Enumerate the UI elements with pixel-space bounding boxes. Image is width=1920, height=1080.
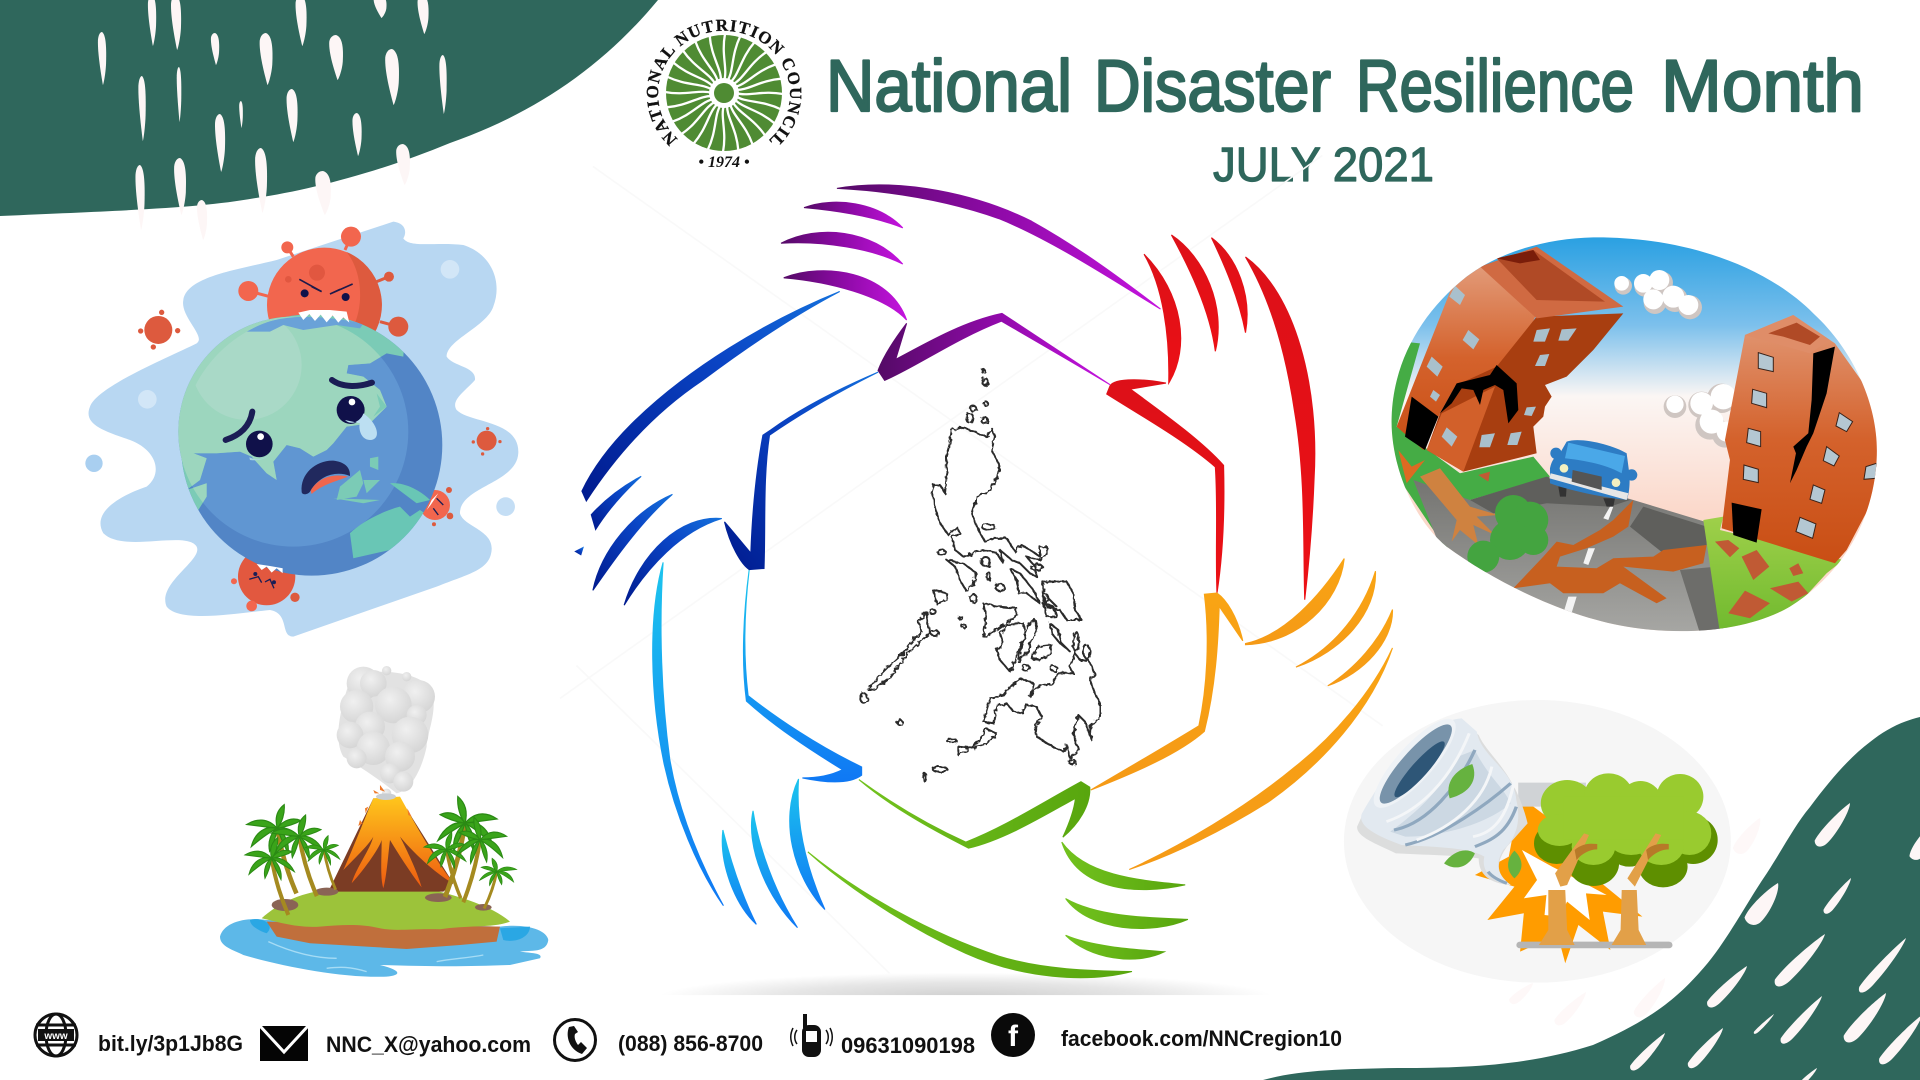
water [220, 919, 548, 977]
island cliff [267, 922, 500, 949]
bottom-right green corner shape with rain drops [1263, 717, 1920, 1080]
smoke plume [337, 666, 435, 798]
orange hand [1091, 559, 1393, 870]
virus teeth biting the earth [257, 310, 438, 573]
website link: bit.ly/3p1Jb8G [98, 1031, 243, 1056]
illustration: tornado and breaking trees [1344, 700, 1731, 983]
logo founding year: • 1974 • [698, 154, 750, 171]
right building [1722, 315, 1880, 563]
rocks [272, 888, 492, 911]
subtitle: date: JULY 2021 [1213, 139, 1434, 192]
earth face [226, 380, 377, 494]
left building [1397, 267, 1537, 450]
road crack [1513, 500, 1707, 603]
illustration: earthquake scene [1392, 237, 1877, 632]
right ground [1703, 517, 1843, 633]
logo: National Nutrition Council seal [646, 20, 802, 171]
icon: globe: www [43, 1031, 68, 1042]
small virus faces [249, 498, 443, 588]
blue car [1549, 440, 1637, 507]
icon: mobile phone [791, 1014, 832, 1057]
logo ring text: NATIONAL NUTRITION COUNCIL [646, 20, 802, 147]
orange burst [1475, 797, 1642, 963]
blue hand [575, 291, 878, 605]
tree canopy [1534, 773, 1718, 887]
island grass [262, 889, 510, 930]
icon: globe [35, 1014, 77, 1056]
title: Resilience [1356, 46, 1634, 127]
title: Month [1661, 46, 1864, 127]
road [1413, 477, 1730, 640]
volcano cone [330, 798, 453, 892]
green hand [808, 780, 1188, 978]
flying leaves [1448, 764, 1474, 798]
illustration: volcano island [220, 666, 548, 977]
small red virus particles [138, 310, 502, 611]
shadow under hands [659, 973, 1273, 1022]
backdrop ellipse [1344, 700, 1731, 983]
illustration: crying earth with viruses [85, 222, 518, 637]
Philippines map outline [861, 369, 1100, 781]
clouds [1614, 270, 1738, 448]
large angry virus [238, 227, 408, 362]
lava flows [343, 797, 453, 888]
footer contact bar [35, 1013, 1342, 1061]
light blue hand [653, 562, 862, 928]
earth globe [181, 314, 442, 576]
purple hand [781, 185, 1160, 385]
icon: envelope [260, 1026, 308, 1061]
icon: telephone [554, 1020, 596, 1060]
title [826, 46, 1864, 127]
palm trees [245, 796, 517, 915]
pale virus particles [85, 260, 515, 516]
top-left green corner shape with rain drops [0, 0, 658, 240]
email address: NNC_X@yahoo.com [326, 1032, 531, 1057]
icon: facebook: f [1008, 1020, 1019, 1053]
icon: facebook [991, 1013, 1035, 1057]
facebook page: facebook.com/NNCregion10 [1061, 1026, 1342, 1051]
pale blue splash [89, 222, 518, 637]
title: Disaster [1094, 46, 1331, 127]
mobile number: 09631090198 [841, 1033, 975, 1058]
red hand [1107, 235, 1315, 600]
left ground [1387, 340, 1550, 550]
fallen tree [1420, 468, 1498, 545]
tornado funnel [1357, 710, 1528, 885]
bushes [1467, 495, 1548, 573]
landline number: (088) 856-8700 [618, 1031, 763, 1056]
central hands ring [560, 155, 1393, 1028]
rubble [1478, 472, 1808, 618]
title: National [826, 46, 1072, 127]
broken tree trunks [1539, 833, 1669, 945]
